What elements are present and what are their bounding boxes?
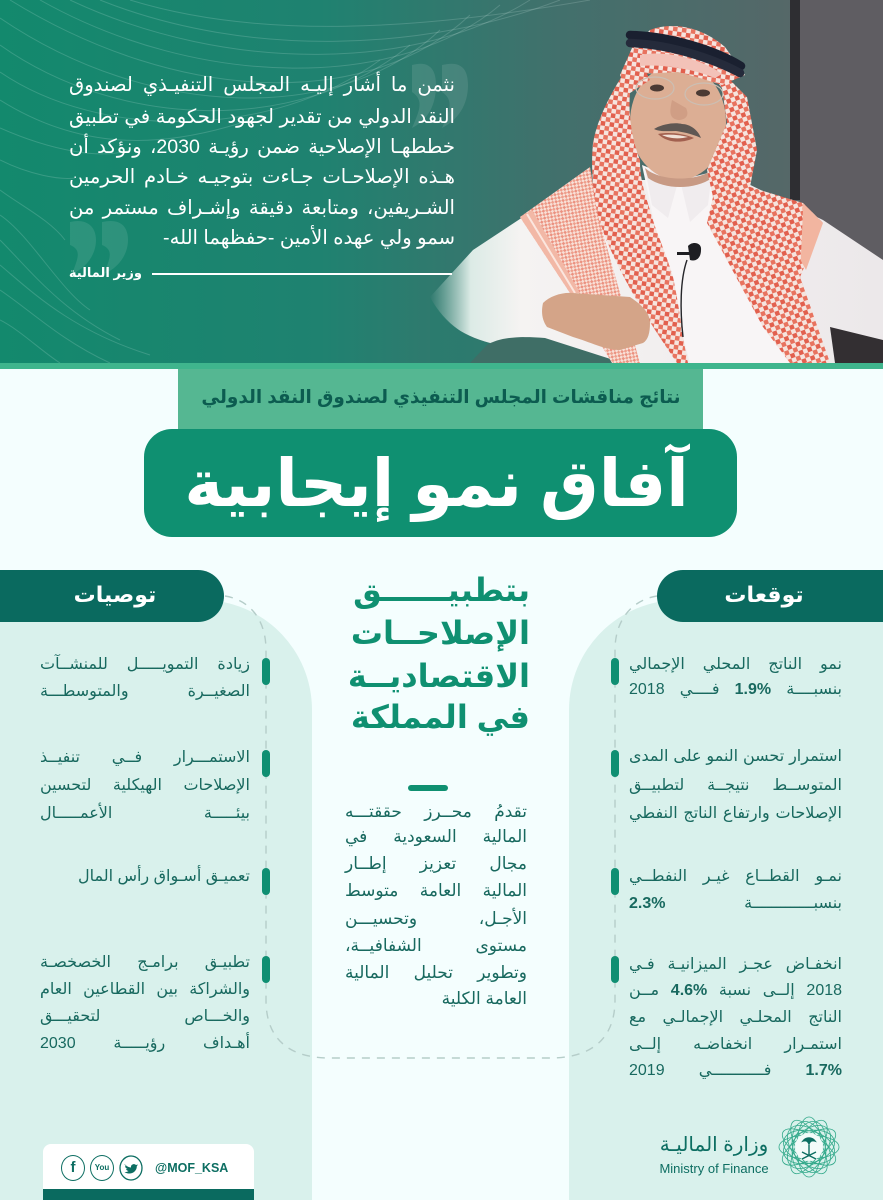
center heading: الاقتصاديــة — [348, 658, 530, 694]
shawl left — [520, 167, 640, 363]
text: المتوســط نتيجــة لتطبيــق — [629, 777, 842, 794]
center paragraph: العامة الكلية — [442, 989, 527, 1008]
center paragraph: المالية العامة متوسط — [345, 881, 527, 900]
heading pill: forecasts — [657, 570, 883, 622]
text: بنسبــــة 1.9% فــــي 2018 — [629, 681, 842, 698]
text: زيادة التمويـــــل للمنشــآت — [40, 656, 250, 673]
collar — [642, 165, 800, 363]
left fold — [592, 53, 688, 363]
text: استمرار تحسن النمو على المدى — [629, 748, 842, 765]
thobe — [430, 180, 883, 363]
mic — [677, 243, 701, 261]
text: نمـو القطــاع غيـر النفطــي — [629, 868, 842, 885]
center paragraph: المالية السعودية في — [345, 827, 527, 846]
quote text: النقد الدولي من تقدير لجهود الحكومة في تطبيق — [69, 106, 455, 128]
ministry logo: وزارة الماليـة — [660, 1134, 768, 1156]
center paragraph: الأجـل، وتحسيـــن — [345, 909, 527, 928]
icon: facebook: f — [70, 1159, 76, 1176]
hero photo banner — [0, 0, 883, 363]
quote text: الشـريفين، ومتابعة دقيقة وإشـراف مستمر من — [69, 197, 455, 219]
center heading: الإصلاحــات — [351, 615, 530, 651]
heading pill: recommendations: توصيات — [74, 582, 156, 607]
text: الناتج المحلـي الإجمالـي مع — [629, 1009, 842, 1026]
quote text: سمو ولي عهده الأمين -حفظهما الله- — [163, 227, 455, 249]
center paragraph: وتطوير تحليل المالية — [345, 963, 527, 982]
mouth — [658, 133, 694, 142]
quote marks — [70, 64, 468, 274]
text: بيئـــــة الأعمـــــال — [40, 805, 250, 822]
quote text: نثمن ما أشار إليـه المجلس التنفيـذي لصندوق — [69, 74, 455, 96]
quote text — [69, 72, 455, 249]
text: بنسبـــــــــــــة 2.3% — [629, 895, 842, 912]
ministry logo: Ministry of Finance — [659, 1161, 769, 1176]
text: 1.7% فـــــــــــي 2019 — [629, 1062, 842, 1079]
text: أهـداف رؤيـــــة 2030 — [40, 1035, 250, 1052]
center paragraph: تقدمُ محــرز حققتـــه — [345, 802, 527, 821]
social handle: @MOF_KSA — [155, 1161, 228, 1175]
text: استمـرار انخفاضـه إلــى — [629, 1036, 842, 1053]
center heading: بتطبيــــــق — [353, 572, 530, 608]
eyes and glasses — [650, 84, 710, 96]
center heading — [348, 572, 530, 736]
center paragraph — [344, 802, 527, 1008]
icon: twitter — [119, 1155, 143, 1181]
face — [630, 64, 726, 180]
hand — [542, 293, 650, 350]
panel: forecasts background — [569, 600, 883, 1200]
main title — [144, 429, 737, 537]
text: الإصلاحات الهيكلية لتحسين — [40, 777, 250, 794]
center heading: في المملكة — [351, 699, 530, 735]
text: الاستمـــرار فــي تنفيــذ — [40, 749, 250, 766]
icon: youtube: You — [95, 1163, 109, 1172]
recommendations list — [262, 658, 270, 983]
icon: facebook — [61, 1155, 85, 1181]
quote text: هـذه الإصلاحـات جـاءت بتوجيـه خـادم الحرمين — [69, 166, 455, 188]
divider — [408, 785, 448, 791]
text: والشراكة بين القطاعين العام — [40, 981, 250, 998]
accent stripe — [0, 363, 883, 369]
heading pill: forecasts: توقعات — [724, 582, 804, 607]
panel: recommendations background — [0, 600, 312, 1200]
person — [430, 26, 883, 363]
quote text: خططهـا الإصلاحية ضمن رؤيـة 2030، ونؤكد أن — [69, 136, 455, 158]
shawl right — [750, 187, 830, 363]
ministry logo — [659, 1116, 840, 1178]
center paragraph: مجال تعزيز إطــار — [345, 854, 527, 873]
icon: rosette emblem — [778, 1116, 840, 1178]
text: تطبيـق برامـج الخصخصـة — [40, 954, 250, 971]
quote attribution: وزير المالية — [69, 265, 142, 280]
text: 2018 إلــى نسبة 4.6% مــن — [629, 982, 842, 999]
icon: youtube — [90, 1155, 114, 1181]
top of headdress — [620, 26, 745, 92]
text: الإصلاحات وارتفاع الناتج النفطي — [629, 805, 842, 822]
decorative waves — [0, 0, 590, 363]
social media card — [43, 1144, 254, 1200]
main title: آفاق نمو إيجابية — [184, 447, 689, 520]
subtitle banner: نتائج مناقشات المجلس التنفيذي لصندوق النقد الدولي — [201, 386, 681, 407]
text: والخـــاص لتحقيـــق — [40, 1008, 250, 1025]
text: تعميـق أسـواق رأس المال — [78, 868, 250, 885]
right fold — [700, 60, 830, 363]
agal — [630, 35, 741, 73]
center paragraph: مستوى الشفافيــة، — [345, 936, 527, 955]
mustache — [654, 123, 701, 138]
text: الصغيــرة والمتوسطـــة — [40, 683, 250, 700]
heading pill: recommendations — [0, 570, 224, 622]
text: نمو الناتج المحلي الإجمالي — [629, 656, 842, 673]
subtitle banner — [178, 369, 703, 429]
forecasts list — [611, 658, 619, 983]
text: انخفـاض عجـز الميزانيـة فـي — [629, 956, 842, 973]
